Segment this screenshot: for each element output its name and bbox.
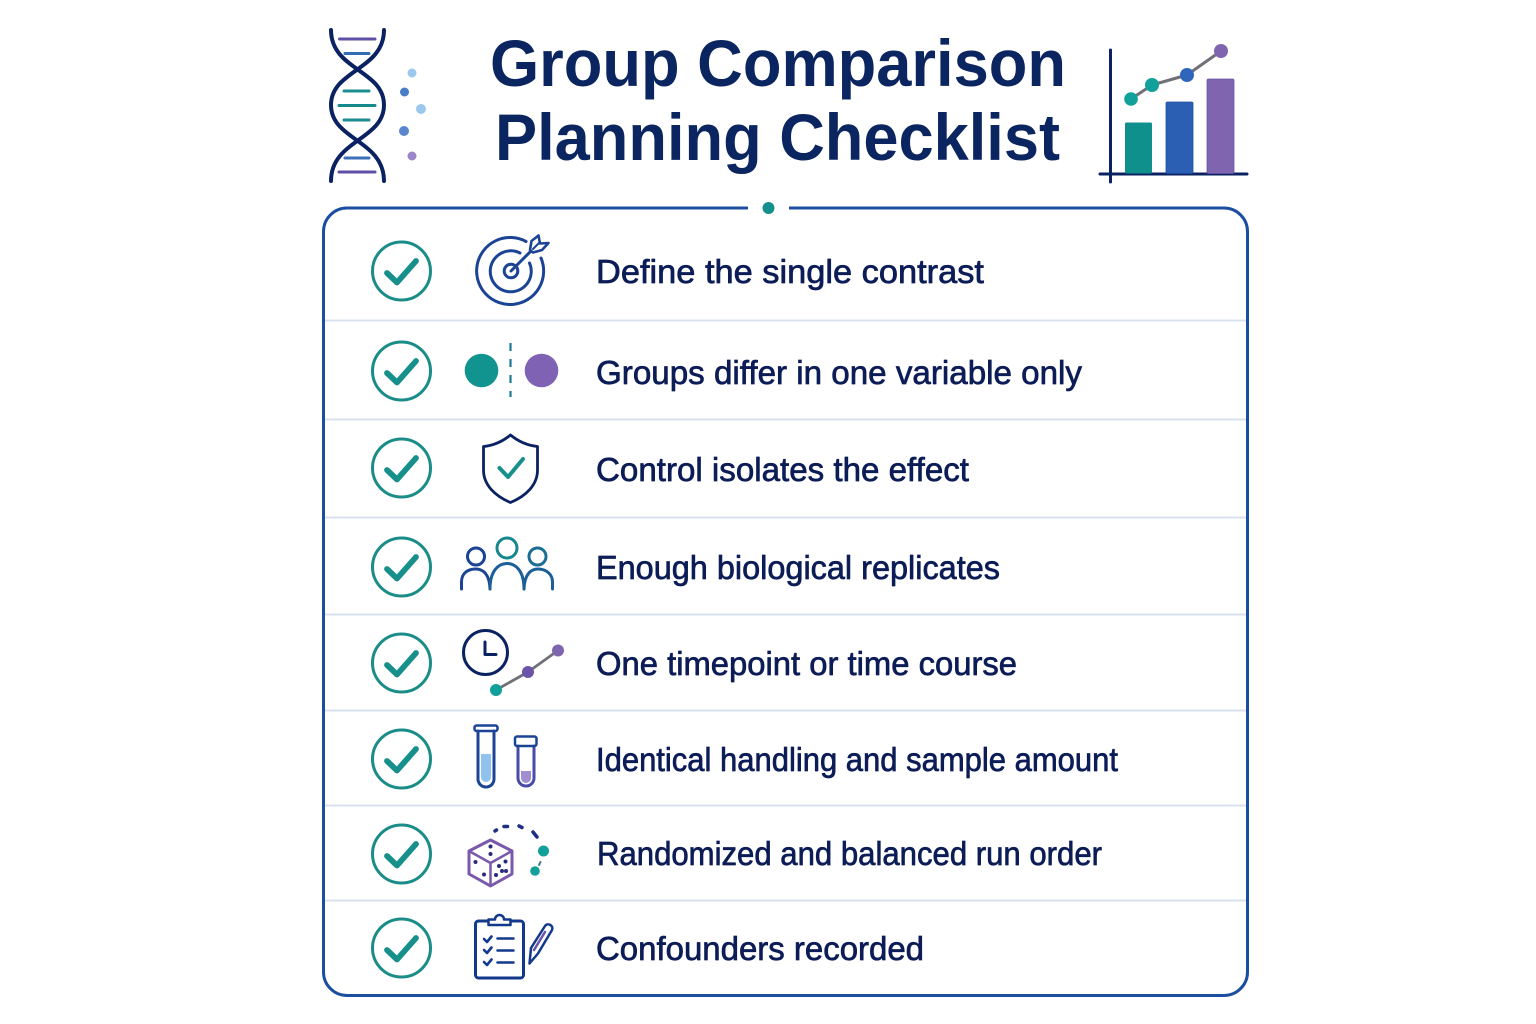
row 2: groups differ in one variable (372, 342, 1082, 400)
label: One timepoint or time course (596, 645, 1017, 682)
row 4: enough biological replicates (372, 538, 1000, 596)
panel: checklist (324, 202, 1248, 996)
icon: clipboard and pen (476, 915, 552, 978)
icon: dice with dotted arc (469, 826, 549, 886)
row 7: randomized and balanced run order (372, 825, 1102, 886)
label: Groups differ in one variable only (596, 354, 1082, 391)
icon: test tubes (474, 726, 536, 787)
icon: three people (462, 538, 552, 589)
row 5: one timepoint or time course (372, 630, 1017, 696)
title (490, 26, 1066, 174)
label: Define the single contrast (596, 253, 984, 290)
label: Control isolates the effect (596, 451, 969, 488)
title: Group Comparison (490, 26, 1066, 100)
row 8: confounders recorded (372, 915, 924, 978)
label: Identical handling and sample amount (596, 741, 1118, 778)
icon: two groups split by dashed line (465, 343, 558, 397)
icon: clock and time course (464, 630, 564, 696)
title: Planning Checklist (495, 100, 1060, 174)
label: Randomized and balanced run order (597, 835, 1102, 872)
icon: target with arrow (477, 236, 548, 304)
row 1: define the single contrast (372, 236, 984, 304)
label: Confounders recorded (596, 930, 924, 967)
row 3: control isolates the effect (372, 435, 969, 502)
row 6: identical handling and sample amount (372, 726, 1118, 788)
icon: shield with check (484, 435, 538, 502)
label: Enough biological replicates (596, 549, 1000, 586)
icon: bar and line chart (1100, 44, 1247, 182)
icon: DNA helix with particles (331, 30, 426, 181)
